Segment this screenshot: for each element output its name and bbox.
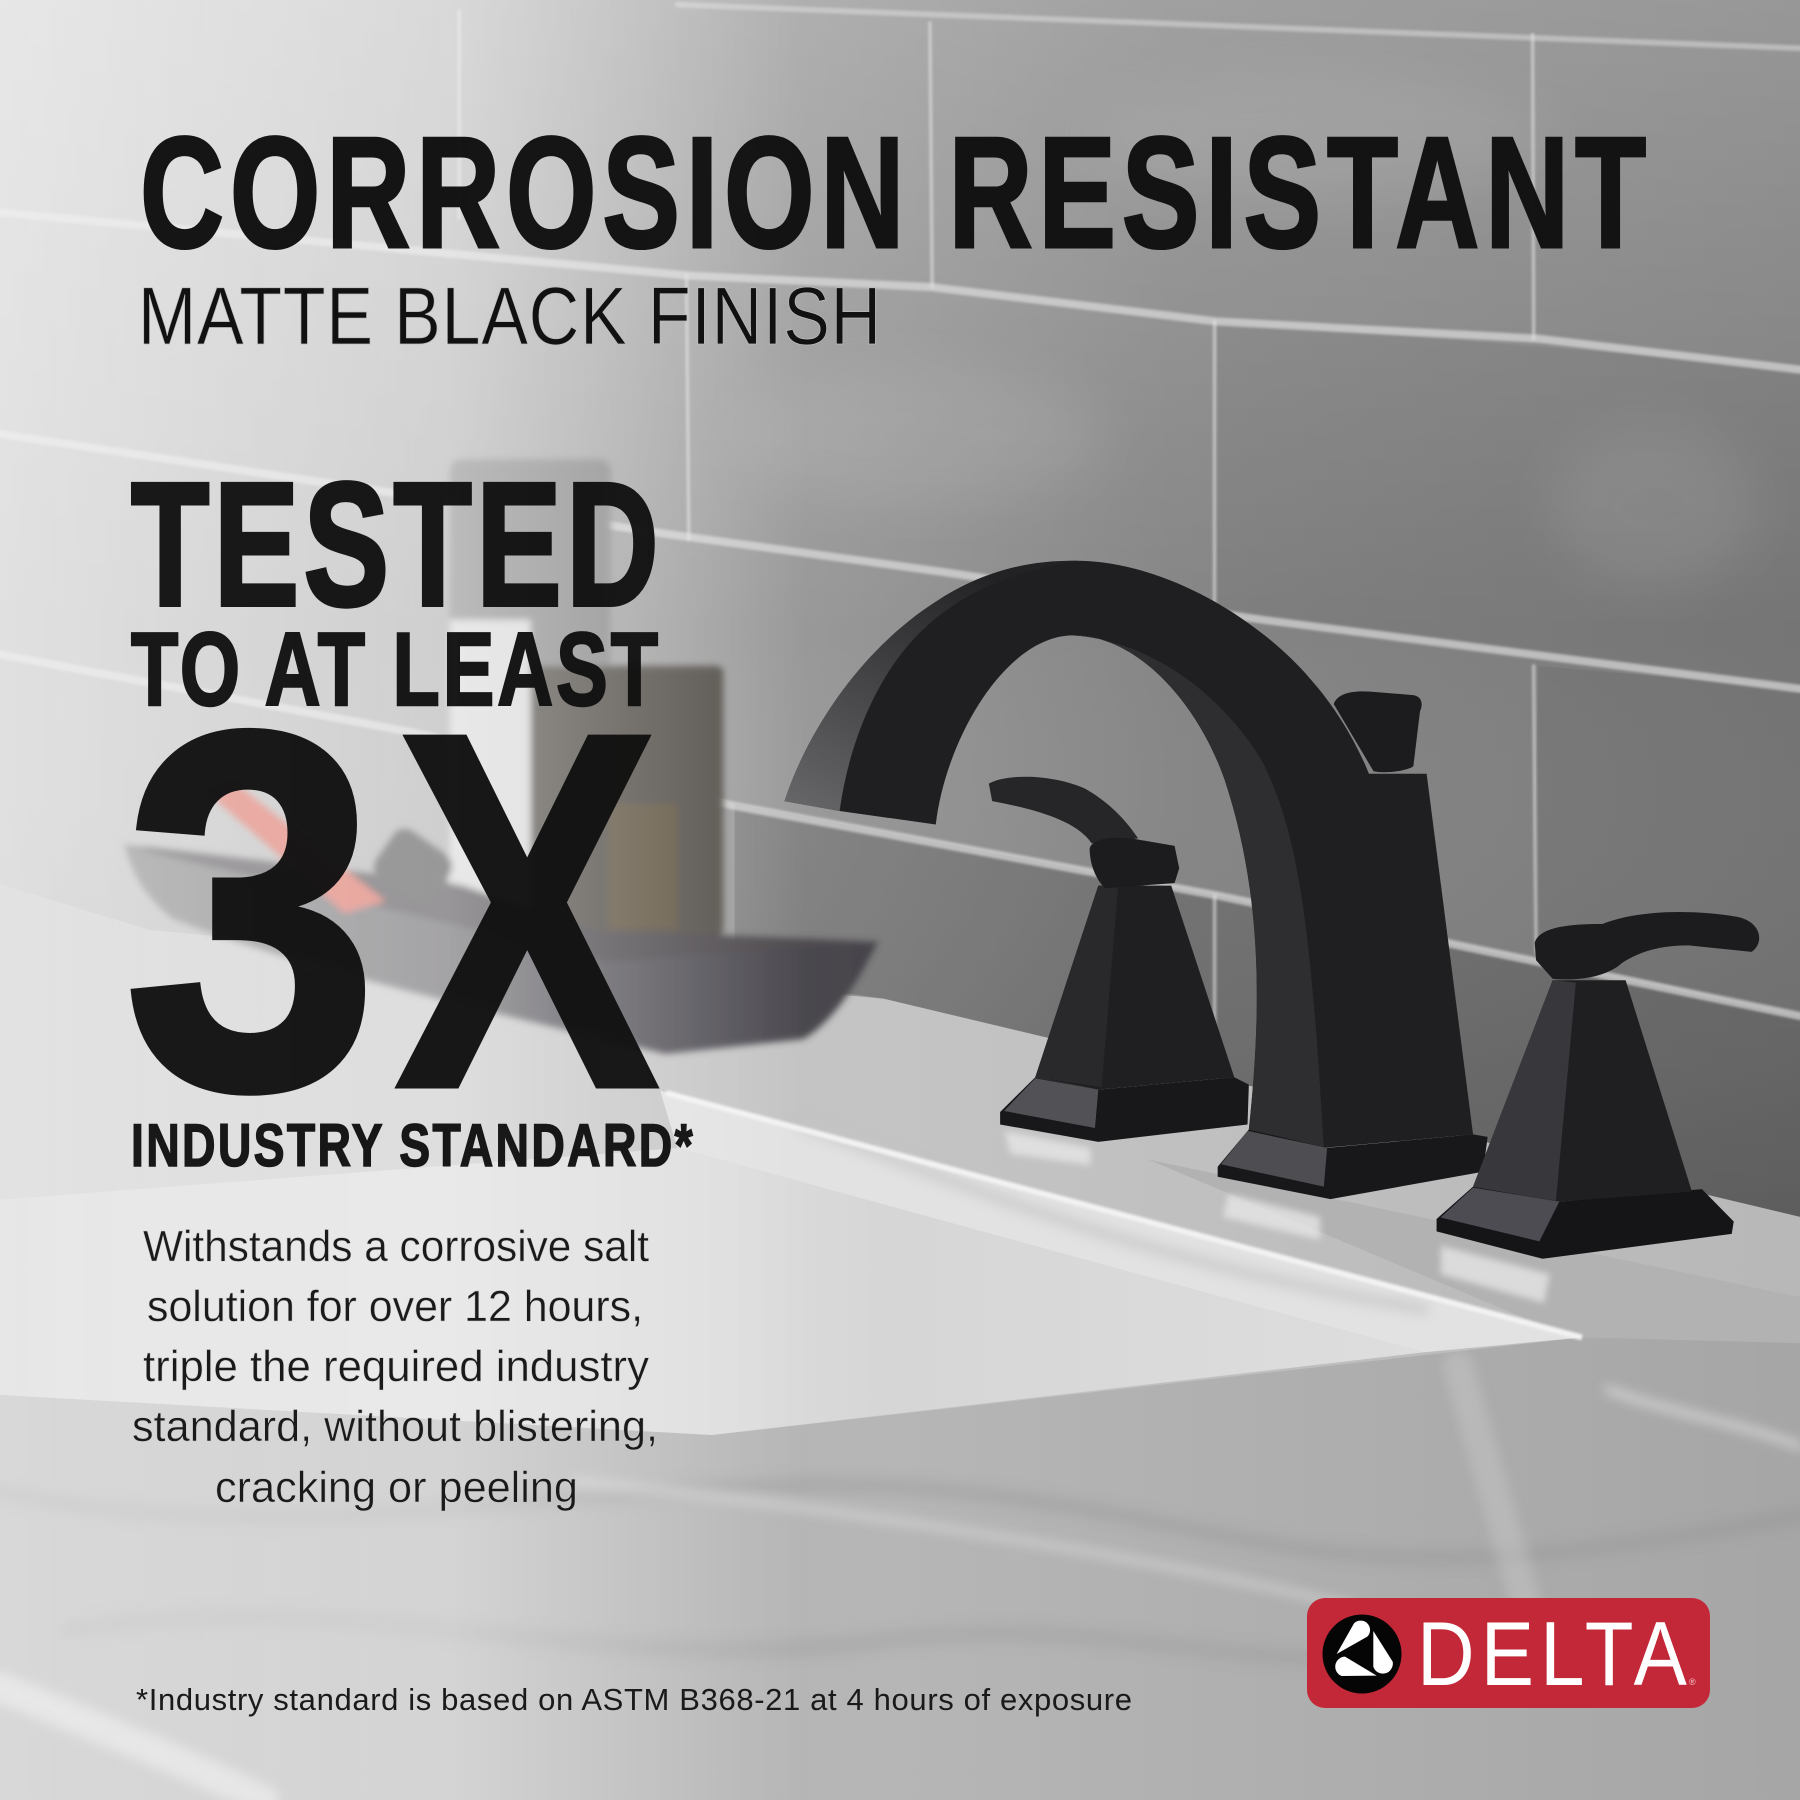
numeral 3: 3 <box>123 626 379 1196</box>
spout and body <box>785 561 1473 1148</box>
rear lift lever <box>1334 691 1422 772</box>
logo emblem <box>1322 1614 1402 1694</box>
faucet reflections on counter <box>1004 1131 1550 1303</box>
marble sink lip <box>660 1091 1582 1352</box>
tubes on dish <box>207 783 385 913</box>
registered mark: ® <box>1689 1677 1696 1687</box>
description text: solution for over 12 hours, <box>147 1282 643 1331</box>
bottles and soap dish <box>124 459 878 1054</box>
sink basin <box>0 1148 1424 1435</box>
tested: TESTED <box>131 447 663 643</box>
soap dish <box>124 844 878 1054</box>
description text: standard, without blistering, <box>132 1402 658 1451</box>
claim block: tested to at least 3X industry standard <box>123 447 695 1196</box>
letter X: X <box>393 626 663 1196</box>
description text <box>132 1222 658 1512</box>
marble front counter <box>0 1337 1800 1800</box>
subheading: matte black finish: MATTE BLACK FINISH <box>138 271 882 362</box>
description text: triple the required industry <box>143 1342 649 1391</box>
marble veins <box>0 1125 1800 1800</box>
bottle: white <box>450 459 611 941</box>
DELTA wordmark: DELTA <box>1417 1604 1693 1705</box>
footnote: *Industry standard is based on ASTM B368-21 at 4 hours of exposure <box>136 1682 1132 1717</box>
logo badge <box>1307 1598 1710 1708</box>
description text: Withstands a corrosive salt <box>143 1222 649 1271</box>
white highlight on counter lip <box>666 1093 1582 1337</box>
tile wall <box>0 0 1800 1263</box>
left handle <box>989 777 1249 1142</box>
right handle <box>1437 912 1759 1259</box>
spout base <box>1218 1129 1488 1199</box>
Delta logo <box>1307 1598 1710 1708</box>
vanity counter top <box>0 884 1800 1800</box>
description text: cracking or peeling <box>215 1463 578 1512</box>
to at least: TO AT LEAST <box>131 612 661 728</box>
bottle: amber <box>530 666 723 936</box>
faucet set <box>785 561 1759 1259</box>
industry standard: INDUSTRY STANDARD* <box>131 1112 695 1179</box>
